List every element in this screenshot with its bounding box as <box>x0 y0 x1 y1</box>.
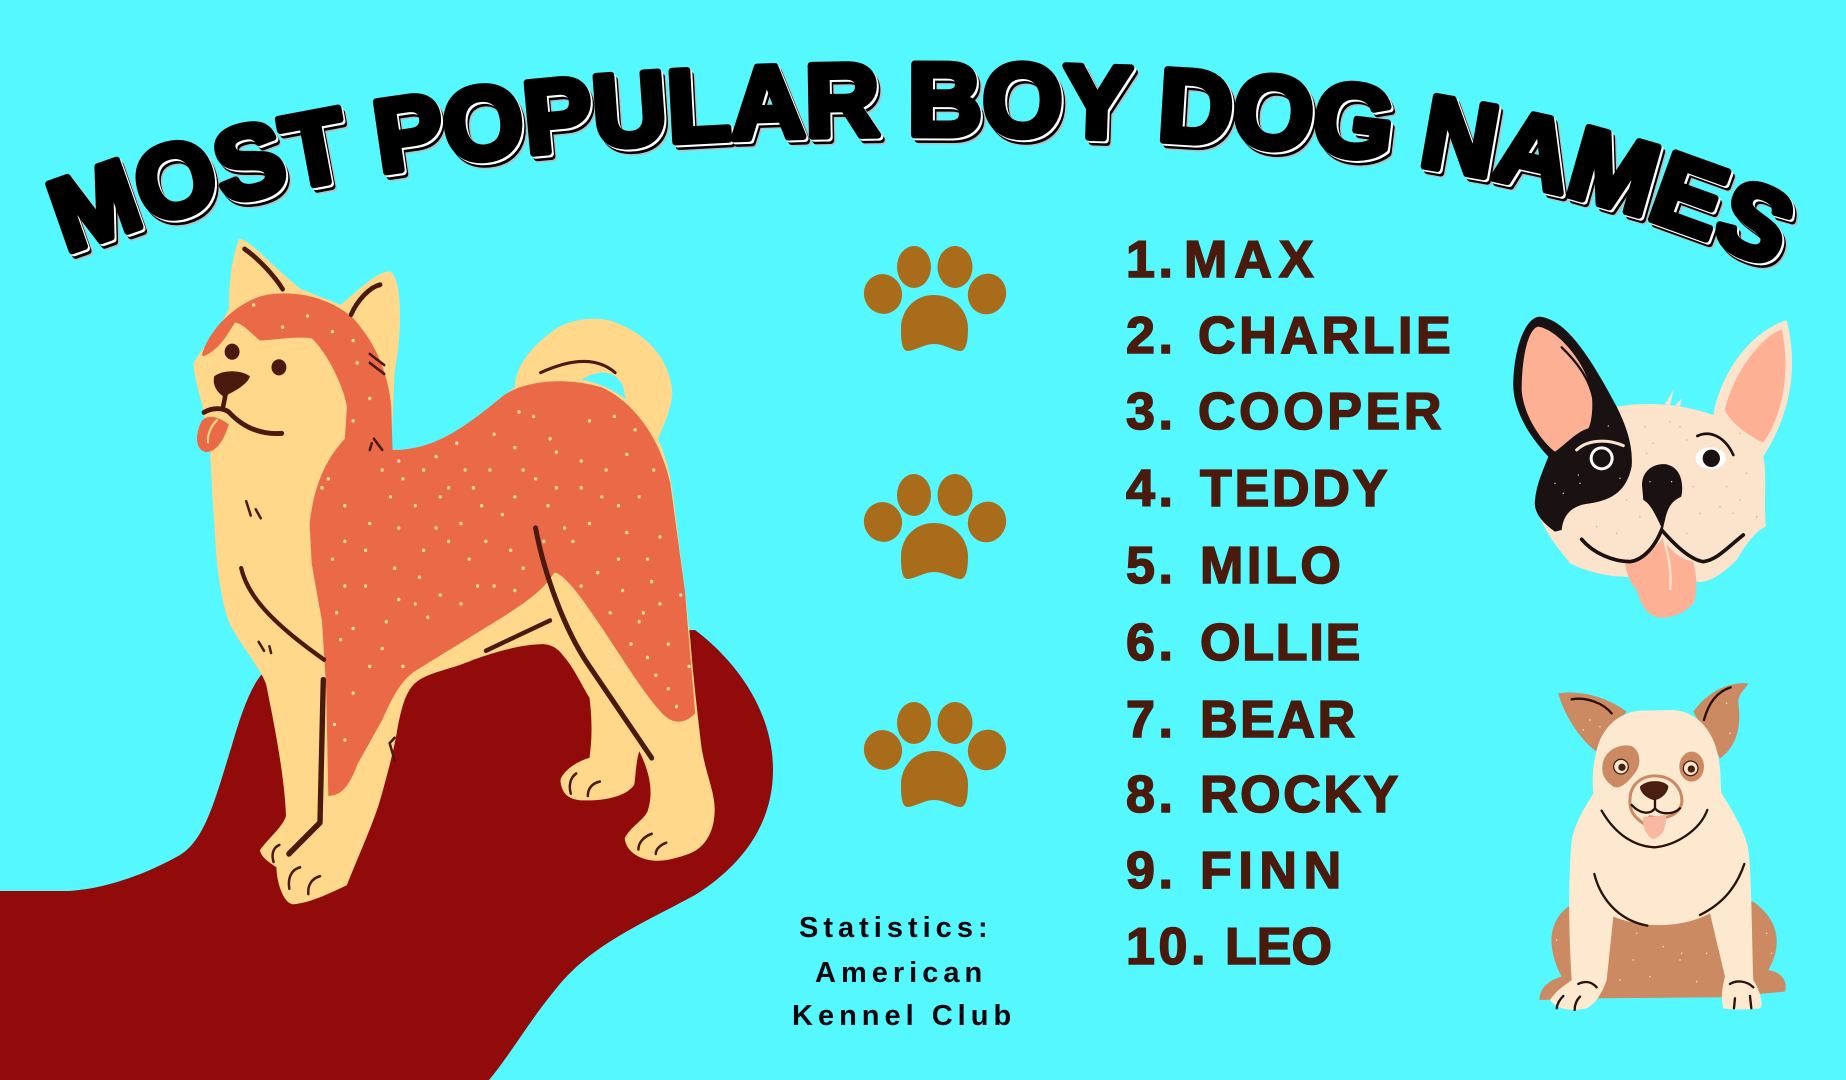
puppy nose <box>1640 781 1668 800</box>
name 1: 1. <box>1126 231 1177 289</box>
coat speckles <box>254 305 689 740</box>
bulldog hair tufts and speckles <box>1665 389 1682 407</box>
dog cream body silhouette <box>194 239 715 904</box>
source credit: Statistics: <box>799 912 993 944</box>
name 10: 10. <box>1126 918 1209 976</box>
bulldog black patch and ear <box>1513 317 1632 532</box>
bulldog mouth <box>1582 530 1743 562</box>
name 4: 4. <box>1126 460 1177 518</box>
name 7: 7. <box>1126 691 1177 749</box>
puppy eyes <box>1614 759 1698 776</box>
dog tongue <box>197 417 229 452</box>
name 7: BEAR <box>1200 691 1358 749</box>
puppy cream body <box>1550 710 1762 1010</box>
name 3: 3. <box>1126 383 1177 441</box>
bulldog nose <box>1642 464 1682 530</box>
dog orange coat <box>202 293 695 796</box>
paw print icon 1 <box>858 246 1012 351</box>
puppy brown haunches <box>1539 902 1786 1000</box>
source credit: Kennel Club <box>792 1000 1016 1032</box>
source credit <box>792 912 1016 1032</box>
illustration: french bulldog head <box>1513 317 1792 618</box>
puppy muzzle <box>1630 776 1682 823</box>
name 2: 2. <box>1126 307 1177 365</box>
bulldog cream face <box>1535 320 1792 582</box>
illustration: standing orange dog <box>194 239 715 904</box>
puppy eye patches <box>1602 745 1639 787</box>
name 10: LEO <box>1225 918 1332 976</box>
name list <box>1126 231 1454 976</box>
dog mouth and fur lines <box>204 249 666 894</box>
tail gap <box>581 373 626 399</box>
paw print icon 2 <box>858 474 1012 579</box>
bulldog eye left <box>1577 441 1623 470</box>
name 1: MAX <box>1184 231 1321 289</box>
name 2: CHARLIE <box>1198 307 1454 365</box>
name 8: ROCKY <box>1200 766 1401 824</box>
bulldog right inner ear <box>1725 329 1785 443</box>
name 9: FINN <box>1200 842 1348 900</box>
dog eyes <box>225 344 240 360</box>
red hill background shape <box>0 630 773 1080</box>
bulldog eye right <box>1695 434 1733 469</box>
bulldog tongue <box>1625 538 1696 618</box>
title: MOST POPULAR BOY DOG NAMES <box>45 60 1798 270</box>
dog nose <box>214 371 250 397</box>
bulldog left inner ear <box>1522 327 1592 452</box>
name 9: 9. <box>1126 842 1177 900</box>
puppy lines <box>1557 687 1753 1010</box>
name 6: 6. <box>1126 614 1177 672</box>
puppy brown ears <box>1558 683 1748 758</box>
name 4: TEDDY <box>1200 460 1390 518</box>
name 5: 5. <box>1126 537 1177 595</box>
name 8: 8. <box>1126 766 1177 824</box>
puppy speckles <box>1557 703 1772 982</box>
name 5: MILO <box>1200 537 1344 595</box>
name 3: COOPER <box>1198 383 1445 441</box>
puppy tongue <box>1643 814 1666 839</box>
paw print icon 3 <box>858 702 1012 807</box>
illustration: sitting puppy <box>1539 683 1786 1010</box>
source credit: American <box>815 957 987 989</box>
name 6: OLLIE <box>1200 614 1362 672</box>
